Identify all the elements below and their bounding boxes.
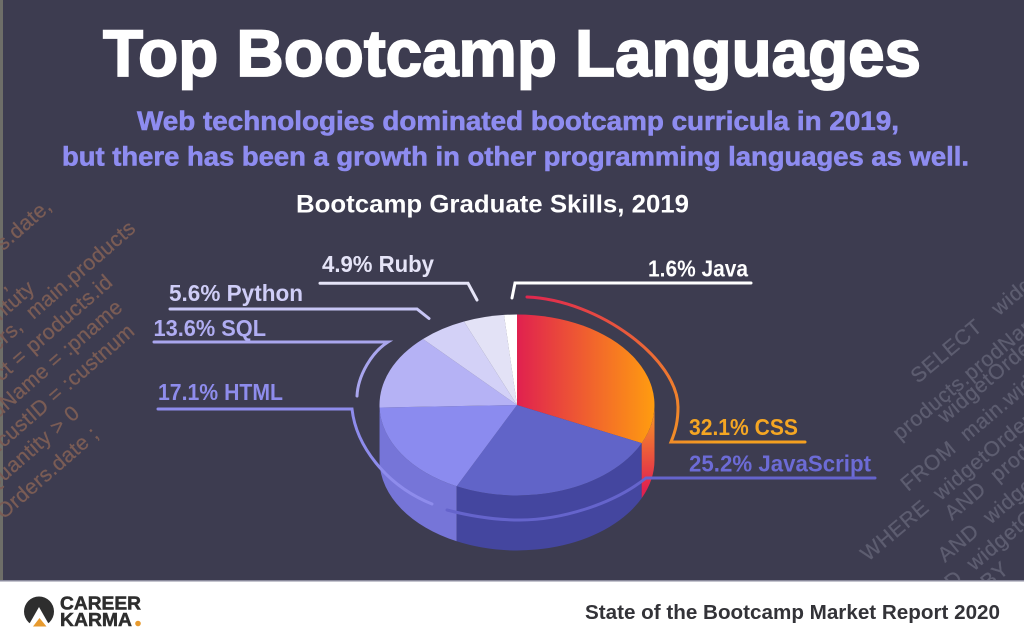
pie side: HTML xyxy=(380,408,457,541)
slice: HTML 17.1% xyxy=(380,405,517,486)
watermark: left code text xyxy=(0,194,140,524)
wordmark xyxy=(60,594,141,630)
slice: CSS 32.1% xyxy=(517,314,654,443)
footer band xyxy=(0,580,1024,641)
label: CSS xyxy=(527,297,805,442)
slice: SQL 13.6% xyxy=(379,339,517,408)
subtitle: Web technologies dominated bootcamp curricula in 2019, xyxy=(137,106,899,136)
slice: Ruby 4.9% xyxy=(464,315,517,405)
wordmark: CAREER xyxy=(60,594,141,614)
logo: Career Karma xyxy=(24,594,141,630)
slice: Java 1.6% xyxy=(504,314,517,405)
subtitle xyxy=(62,106,969,172)
label: JavaScript: 25.2% JavaScript xyxy=(689,451,871,477)
label: Ruby: 4.9% Ruby xyxy=(322,251,434,277)
label: HTML: 17.1% HTML xyxy=(158,379,283,405)
wordmark: KARMA xyxy=(60,610,132,630)
label: HTML xyxy=(158,379,432,504)
label: Python: 5.6% Python xyxy=(169,280,303,306)
subtitle: but there has been a growth in other programming languages as well. xyxy=(62,142,969,172)
icon: mountain in circle xyxy=(24,596,54,628)
label: SQL xyxy=(154,315,388,396)
footer report title: State of the Bootcamp Market Report 2020 xyxy=(585,602,1000,624)
watermark: right code text: BY xyxy=(976,557,1014,594)
pie side: JavaScript xyxy=(457,443,642,550)
label: Java xyxy=(512,256,751,298)
label: SQL: 13.6% SQL xyxy=(154,315,266,341)
label: Java: 1.6% Java xyxy=(648,256,748,282)
chart heading: Bootcamp Graduate Skills, 2019 xyxy=(296,190,689,218)
3D pie chart xyxy=(379,314,654,550)
slice: JavaScript 25.2% xyxy=(457,405,642,495)
title: Top Bootcamp Languages xyxy=(103,16,921,90)
label: Python xyxy=(169,280,429,318)
label: JavaScript xyxy=(447,451,875,520)
pie side: CSS xyxy=(642,405,654,498)
watermark: right code text xyxy=(856,217,1024,594)
label: CSS: 32.1% CSS xyxy=(689,414,798,440)
label: Ruby xyxy=(320,251,477,300)
slice: Python 5.6% xyxy=(423,322,517,405)
